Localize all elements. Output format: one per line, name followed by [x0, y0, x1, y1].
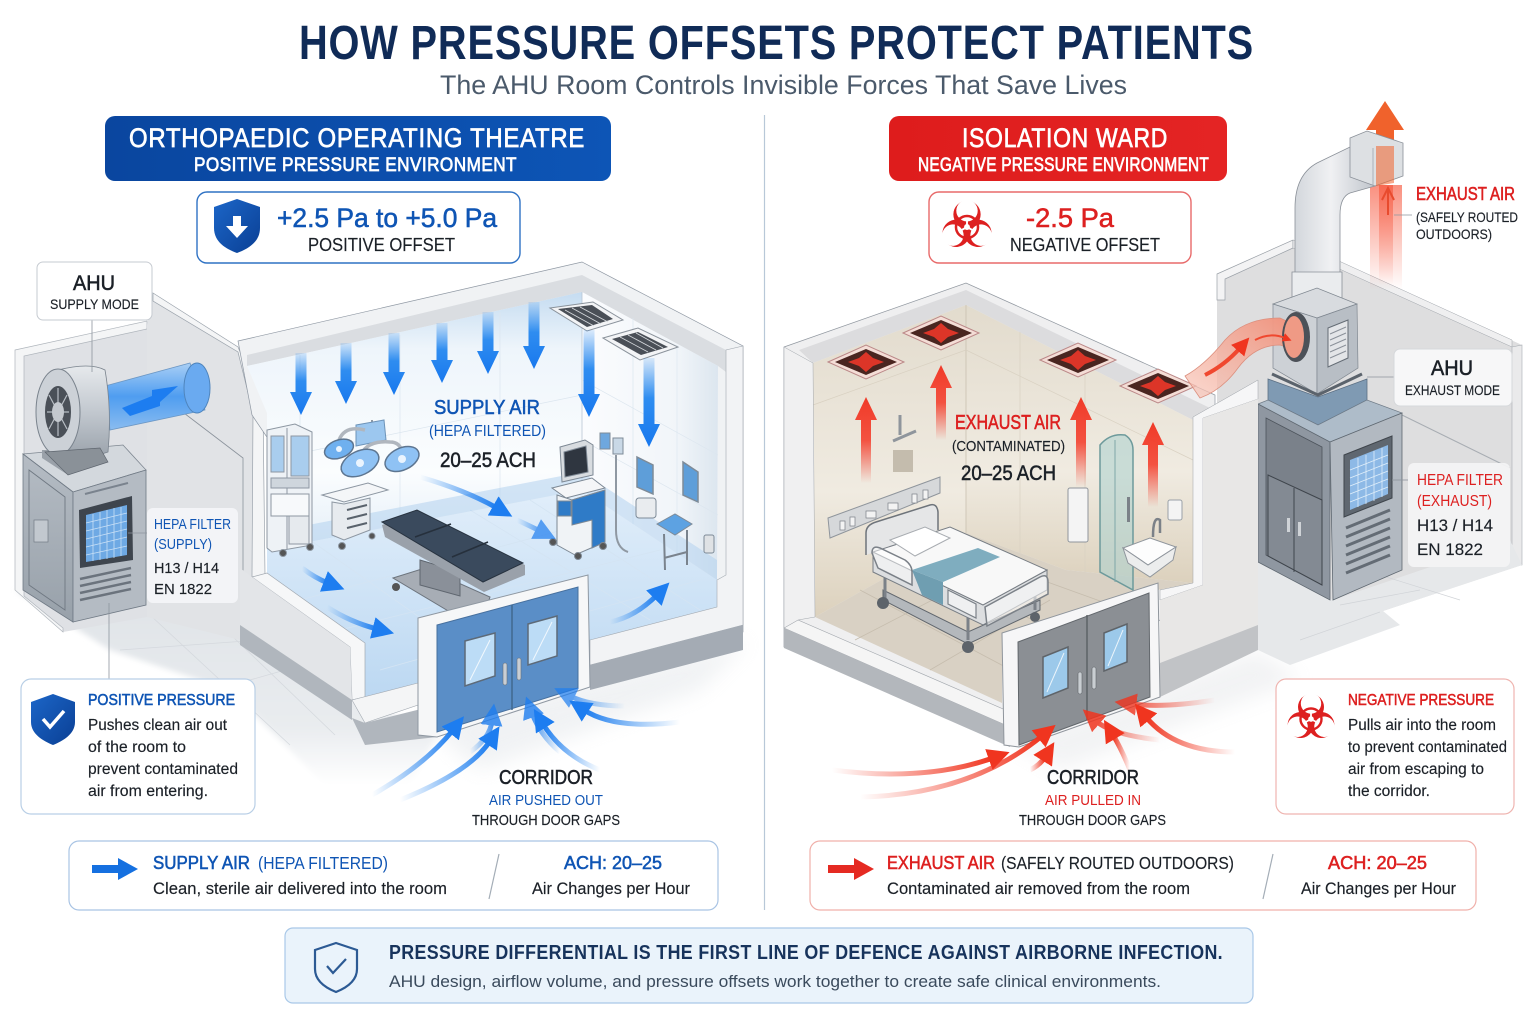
corridor label right: AIR PULLED IN [1045, 793, 1141, 809]
AHU exhaust label: EXHAUST MODE [1405, 382, 1500, 398]
exhaust air room label: EXHAUST AIR [955, 412, 1061, 434]
surgical cabinets [267, 424, 314, 556]
icon: outline shield [315, 943, 357, 992]
ceiling exhaust grilles [828, 316, 1196, 403]
door gap arrows (air pushed out) [372, 696, 680, 800]
AHU supply label: SUPPLY MODE [50, 296, 139, 312]
supply air room label: 20–25 ACH [440, 449, 536, 472]
ward walls [813, 305, 966, 617]
vertical duct [1292, 131, 1403, 314]
isolation room shell [784, 283, 1215, 735]
negative pressure card: Pulls air into the room [1348, 717, 1496, 734]
front walls ward [784, 347, 1258, 747]
legend left: ACH: 20–25 [564, 853, 662, 873]
banner: isolation ward: ISOLATION WARD [962, 123, 1168, 153]
subtitle: The AHU Room Controls Invisible Forces That Save Lives [440, 70, 1127, 100]
room floor [267, 490, 717, 697]
icon: shield with check [31, 694, 75, 745]
anaesthesia cart and monitor [550, 440, 606, 560]
icon: blue arrow [92, 858, 138, 880]
exhaust plant room [1010, 240, 1522, 770]
wall panels and stool [600, 433, 714, 570]
callout lines [92, 320, 147, 680]
headwall panel [828, 477, 940, 538]
negative pressure card: to prevent contaminated [1348, 739, 1507, 756]
corridor label left: THROUGH DOOR GAPS [472, 813, 620, 829]
bottom takeaway banner: PRESSURE DIFFERENTIAL IS THE FIRST LINE OF DEFENCE AGAINST AIRBORNE INFECTION. [389, 942, 1223, 964]
AHU supply unit [23, 445, 146, 622]
icon: red arrow [828, 858, 874, 880]
icon: biohazard small [1282, 693, 1340, 743]
positive offset box: +2.5 Pa to +5.0 Pa [277, 203, 498, 233]
sink [1123, 519, 1176, 577]
callout lines [1367, 215, 1412, 480]
exhaust air room label: (CONTAMINATED) [952, 438, 1065, 455]
operating table [382, 510, 525, 612]
bottom takeaway banner: AHU design, airflow volume, and pressure offsets work together to create safe clinical environments. [389, 972, 1161, 991]
supply air room label [429, 397, 546, 472]
AHU supply label: AHU [73, 272, 115, 295]
left illustration: operating theatre [15, 262, 750, 800]
icon: biohazard [937, 200, 997, 252]
exhaust air room label: 20–25 ACH [961, 462, 1056, 485]
bottom takeaway banner [285, 928, 1253, 1003]
AHU alcove and corridor floor [15, 293, 750, 785]
banner: isolation ward [889, 116, 1227, 181]
legend right: Air Changes per Hour [1301, 879, 1456, 898]
legend left: Clean, sterile air delivered into the room [153, 879, 447, 898]
legend right: (SAFELY ROUTED OUTDOORS) [1001, 853, 1234, 873]
supply air room label: SUPPLY AIR [434, 397, 540, 419]
legend right: EXHAUST AIR [887, 853, 995, 873]
title: HOW PRESSURE OFFSETS PROTECT PATIENTS [299, 17, 1254, 70]
positive offset box: POSITIVE OFFSET [308, 235, 455, 255]
AHU exhaust label [1394, 349, 1512, 406]
exhaust stream and arrow [1366, 101, 1404, 290]
corridor label right [1019, 767, 1166, 829]
instrument cart [322, 483, 388, 550]
HEPA exhaust card: EN 1822 [1417, 540, 1483, 559]
double doors (operating theatre) [418, 575, 590, 737]
corridor label left: CORRIDOR [499, 767, 593, 789]
negative offset box [929, 192, 1191, 263]
positive pressure card: air from entering. [88, 783, 208, 800]
exhaust air outdoor label: EXHAUST AIR [1416, 184, 1515, 204]
exhaust air room label [952, 412, 1065, 485]
negative pressure card: air from escaping to [1348, 761, 1484, 778]
banner: operating theatre [105, 116, 611, 181]
shower enclosure [1100, 435, 1133, 590]
ward floor [815, 533, 1193, 703]
room back walls [247, 292, 582, 550]
legend left [69, 841, 718, 910]
exhaust air outdoor label: (SAFELY ROUTED [1416, 209, 1518, 225]
HEPA supply card: H13 / H14 [154, 560, 219, 577]
front walls [240, 346, 743, 745]
legend right: ACH: 20–25 [1328, 853, 1427, 873]
corridor label left [472, 767, 620, 829]
legend right: Contaminated air removed from the room [887, 879, 1190, 898]
blue-grey plinth [1268, 374, 1367, 425]
surgical lights [322, 420, 423, 482]
operating room shell [238, 262, 743, 697]
supply air down arrows [290, 302, 660, 447]
icon: shield with arrow [214, 199, 260, 253]
negative offset box: -2.5 Pa [1026, 203, 1115, 233]
negative pressure card: NEGATIVE PRESSURE [1348, 692, 1494, 709]
exhaust up arrows [855, 365, 1164, 507]
HEPA supply card: HEPA FILTER [154, 516, 231, 533]
AHU exhaust label: AHU [1431, 357, 1473, 380]
positive pressure card: POSITIVE PRESSURE [88, 692, 235, 709]
ceiling diffusers (supply) [550, 302, 678, 360]
banner: isolation ward: NEGATIVE PRESSURE ENVIRONMENT [918, 155, 1209, 176]
door gap arrows (air pulled in) [832, 700, 1235, 797]
HEPA supply card: (SUPPLY) [154, 536, 212, 553]
positive pressure card: of the room to [88, 739, 186, 756]
upper AHU box [1273, 288, 1358, 394]
negative pressure card: the corridor. [1348, 783, 1430, 800]
HEPA exhaust card: H13 / H14 [1417, 516, 1493, 535]
positive pressure card: prevent contaminated [88, 761, 238, 778]
AHU blower [36, 366, 109, 475]
HEPA supply card [147, 508, 238, 603]
banner: operating theatre: POSITIVE PRESSURE ENVIRONMENT [194, 155, 517, 176]
legend left: Air Changes per Hour [532, 879, 690, 898]
legend right [810, 841, 1476, 910]
right illustration: isolation ward [784, 101, 1522, 797]
legend left: SUPPLY AIR [153, 853, 250, 873]
positive offset box [197, 192, 520, 263]
corridor label right: CORRIDOR [1047, 767, 1139, 789]
negative pressure card [1276, 679, 1514, 814]
wall fixtures [893, 415, 1182, 542]
positive pressure card [21, 679, 255, 814]
pink exhaust duct [1185, 312, 1310, 398]
exhaust air outdoor label [1416, 184, 1518, 242]
legend left: (HEPA FILTERED) [258, 853, 388, 873]
HEPA exhaust card: HEPA FILTER [1417, 472, 1503, 489]
corridor label left: AIR PUSHED OUT [489, 793, 603, 809]
exhaust air outdoor label: OUTDOORS) [1416, 226, 1492, 242]
HEPA exhaust card [1408, 463, 1510, 567]
banner: operating theatre: ORTHOPAEDIC OPERATING THEATRE [129, 123, 585, 153]
negative offset box: NEGATIVE OFFSET [1010, 235, 1160, 255]
corridor label right: THROUGH DOOR GAPS [1019, 813, 1166, 829]
AHU exhaust cabinet [1258, 400, 1402, 600]
double doors (ward) [1002, 583, 1160, 747]
supply air room label: (HEPA FILTERED) [429, 423, 546, 440]
AHU supply label [37, 262, 152, 320]
positive pressure card: Pushes clean air out [88, 717, 228, 734]
hospital bed [866, 505, 1048, 653]
floor airflow arrows [302, 477, 657, 629]
HEPA supply card: EN 1822 [154, 581, 212, 598]
HEPA exhaust card: (EXHAUST) [1417, 493, 1492, 510]
AHU blue supply duct [105, 363, 210, 430]
